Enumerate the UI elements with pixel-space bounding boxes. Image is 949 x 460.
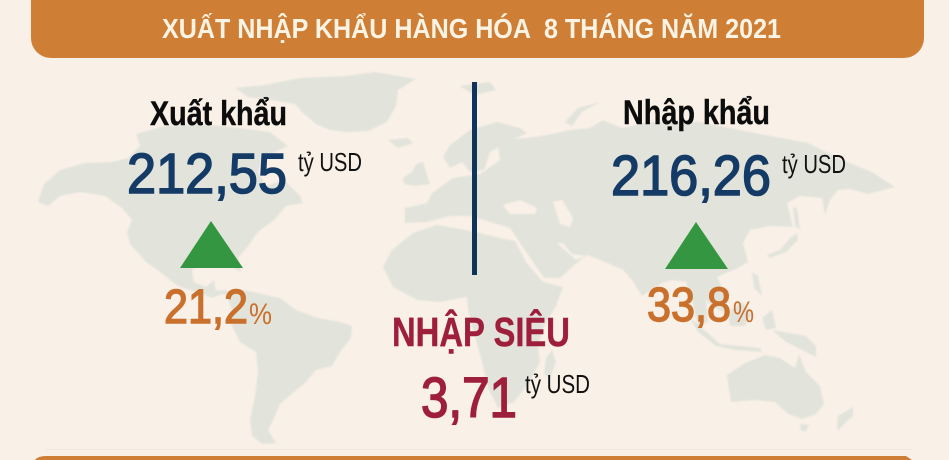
bottom banner bbox=[35, 449, 912, 460]
map: Black Sea cut-out bbox=[503, 200, 537, 214]
map: New Guinea bbox=[772, 330, 816, 357]
map: Sakhalin bbox=[793, 207, 800, 230]
map: Sulawesi bbox=[762, 310, 776, 330]
deficit value: 3,71 bbox=[421, 366, 517, 430]
map: Svalbard bbox=[460, 82, 496, 95]
map: Madagascar bbox=[544, 350, 556, 378]
heading: trade deficit: NHẬP SIÊU bbox=[392, 309, 570, 355]
exports unit: tỷ USD bbox=[298, 147, 362, 177]
vertical divider bbox=[472, 82, 477, 275]
exports percent sign: % bbox=[249, 298, 272, 331]
heading: exports: Xuất khẩu bbox=[150, 95, 287, 133]
map: Europe and Asia bbox=[405, 120, 895, 326]
imports growth: 33,8 bbox=[647, 279, 731, 332]
map: Novaya Zemlya bbox=[565, 102, 600, 126]
map: Australia bbox=[727, 354, 824, 419]
icon: up triangle exports bbox=[180, 221, 243, 268]
heading: imports: Nhập khẩu bbox=[623, 94, 770, 132]
deficit unit: tỷ USD bbox=[525, 369, 590, 399]
map: Japan bbox=[767, 233, 798, 258]
panel: trade deficit bbox=[392, 309, 590, 430]
map: Tasmania bbox=[800, 424, 809, 431]
map: Borneo bbox=[728, 302, 752, 326]
map: Sumatra and Java bbox=[690, 318, 762, 352]
title text: XUẤT NHẬP KHẨU HÀNG HÓA 8 THÁNG NĂM 2021 bbox=[162, 13, 781, 44]
map: Scandinavia bbox=[443, 122, 527, 172]
map: Africa bbox=[383, 225, 563, 408]
imports unit: tỷ USD bbox=[782, 149, 846, 179]
title banner bbox=[31, 0, 924, 58]
map: Philippines bbox=[752, 272, 762, 296]
map: New Zealand bbox=[837, 407, 853, 431]
world map background bbox=[38, 72, 895, 444]
map: Caspian Sea cut-out bbox=[553, 200, 573, 227]
exports growth: 21,2 bbox=[164, 281, 248, 334]
imports value: 216,26 bbox=[611, 144, 771, 208]
map: Greenland bbox=[235, 72, 416, 132]
icon: up triangle imports bbox=[665, 222, 728, 269]
panel: exports bbox=[127, 95, 362, 334]
map: Iceland bbox=[388, 138, 413, 148]
exports value: 212,55 bbox=[127, 142, 287, 206]
map: British Isles bbox=[403, 162, 430, 186]
map: Persian Gulf cut-out bbox=[557, 243, 586, 260]
map: North America bbox=[38, 124, 303, 298]
imports percent sign: % bbox=[733, 296, 754, 329]
map: South America bbox=[226, 290, 352, 444]
panel: imports bbox=[611, 94, 846, 332]
